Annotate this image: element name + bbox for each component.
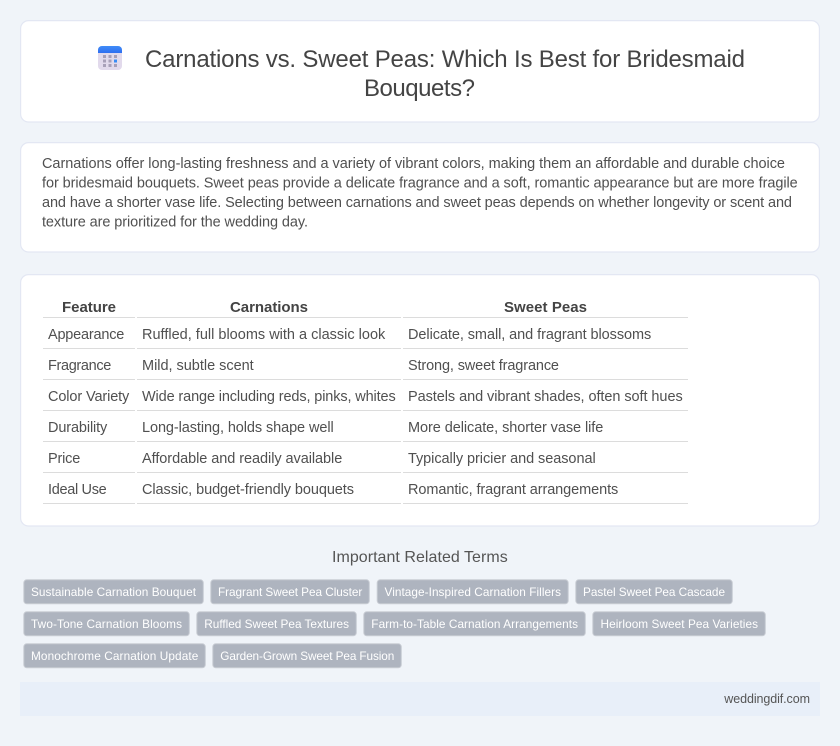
row: appearance: Delicate, small, and fragrant blossoms [408,327,651,343]
row: durability: More delicate, shorter vase life [408,420,603,436]
table header row: Carnations [230,299,308,316]
tag: Farm-to-Table Carnation Arrangements [371,617,578,631]
row: color variety [48,389,683,405]
row: durability: Long-lasting, holds shape well [142,420,334,436]
title [145,46,745,102]
tag: Garden-Grown Sweet Pea Fusion [220,649,394,663]
table header row: Feature [62,299,116,316]
row: durability: Durability [48,420,108,436]
related term tags [24,580,765,668]
row: fragrance [48,358,559,374]
row: color variety: Wide range including reds, pinks, whites [142,389,396,405]
row: ideal use: Classic, budget-friendly bouquets [142,482,354,498]
tag: Fragrant Sweet Pea Cluster [218,585,362,599]
tag [364,612,585,636]
footer source text: weddingdif.com [723,692,810,706]
tag [24,580,203,604]
tag [377,580,568,604]
tag [213,644,401,668]
row: ideal use: Ideal Use [48,482,107,498]
icon: calendar [98,46,122,70]
row: durability [48,420,603,436]
footer [20,682,820,716]
row: fragrance: Strong, sweet fragrance [408,358,559,374]
row: price: Affordable and readily available [142,451,342,467]
table header row [62,299,587,316]
tag: Ruffled Sweet Pea Textures [204,617,349,631]
description text [42,156,798,230]
table header row: Sweet Peas [504,299,587,316]
title: Carnations vs. Sweet Peas: Which Is Best for Bridesmaid [145,46,745,73]
row: price: Price [48,451,80,467]
tag: Monochrome Carnation Update [31,649,199,663]
tag [24,612,189,636]
row: ideal use: Romantic, fragrant arrangements [408,482,618,498]
row: ideal use [48,482,618,498]
title: Bouquets? [364,75,475,102]
panel: comparison table [21,275,819,526]
row: appearance: Appearance [48,327,124,343]
row: fragrance: Fragrance [48,358,111,374]
tag: Sustainable Carnation Bouquet [31,585,197,599]
row: appearance [48,327,651,343]
description text: Carnations offer long-lasting freshness and a variety of vibrant colors, making them an affordable and durable choice [42,156,785,172]
panel: header [21,21,819,122]
heading: related terms: Important Related Terms [332,549,508,566]
row: color variety: Color Variety [48,389,130,405]
tag [24,644,205,668]
description text: for bridesmaid bouquets. Sweet peas provide a delicate fragrance and a soft, romantic appearance but are more fragile [42,176,798,192]
tag: Pastel Sweet Pea Cascade [583,585,725,599]
tag [593,612,765,636]
tag: Heirloom Sweet Pea Varieties [600,617,758,631]
row: color variety: Pastels and vibrant shades, often soft hues [408,389,683,405]
panel: description [21,143,819,252]
row: price [48,451,596,467]
description text: texture are prioritized for the wedding day. [42,214,308,230]
tag: Two-Tone Carnation Blooms [31,617,182,631]
tag [197,612,356,636]
tag: Vintage-Inspired Carnation Fillers [384,585,561,599]
row: appearance: Ruffled, full blooms with a classic look [142,327,386,343]
row: price: Typically pricier and seasonal [408,451,596,467]
tag [211,580,369,604]
description text: and have a shorter vase life. Selecting between carnations and sweet peas depends on whether longevity or scent and [42,195,792,211]
row: fragrance: Mild, subtle scent [142,358,254,374]
tag [576,580,732,604]
